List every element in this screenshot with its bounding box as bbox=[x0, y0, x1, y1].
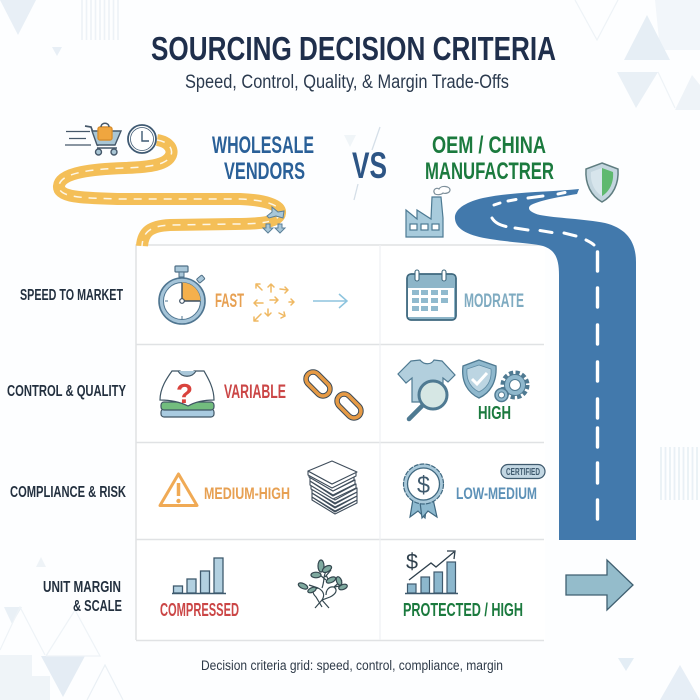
icon: rising bar chart with dollar: $ bbox=[406, 549, 418, 574]
value: protected / high: PROTECTED / HIGH bbox=[403, 600, 523, 620]
background triangles: top right bbox=[575, 0, 700, 110]
arrow: right bbox=[566, 560, 633, 610]
row label: control and quality: CONTROL & QUALITY bbox=[7, 383, 126, 400]
icon: gears bbox=[495, 373, 527, 402]
icon: thin arrow bbox=[313, 294, 347, 308]
row label: unit margin and scale: & SCALE bbox=[73, 598, 122, 615]
VS label: VS bbox=[352, 145, 387, 186]
subtitle: Speed, Control, Quality, & Margin Trade-Offs bbox=[185, 72, 509, 93]
icon: question mark: ? bbox=[176, 378, 193, 409]
row label: compliance and risk: COMPLIANCE & RISK bbox=[10, 484, 126, 501]
icon: tangled plant bbox=[297, 560, 348, 608]
icon: shopping cart with speed lines bbox=[65, 123, 121, 155]
icon: small bar chart bbox=[172, 558, 226, 594]
icon: shield with check bbox=[463, 360, 496, 398]
value: moderate: MODRATE bbox=[464, 291, 524, 312]
icon: factory bbox=[406, 186, 450, 237]
icon: scattered arrows bbox=[254, 284, 294, 321]
background stripes and triangles: bottom right bbox=[618, 447, 700, 700]
title: SOURCING DECISION CRITERIA bbox=[151, 30, 556, 67]
caption: Decision criteria grid: speed, control, compliance, margin bbox=[201, 658, 503, 673]
value: variable: VARIABLE bbox=[224, 382, 286, 403]
heading: wholesale vendors bbox=[212, 132, 314, 185]
icon: shirt under magnifier bbox=[398, 360, 455, 419]
icon: rosette with dollar bbox=[404, 464, 444, 518]
icon: paper stack bbox=[308, 461, 357, 514]
icon: calendar bbox=[407, 270, 456, 320]
badge: certified bbox=[501, 464, 545, 478]
row label: unit margin and scale bbox=[43, 579, 122, 615]
background triangles: bottom left bbox=[0, 557, 123, 700]
icon: stopwatch bbox=[159, 266, 205, 324]
row label: unit margin and scale: UNIT MARGIN bbox=[43, 579, 121, 596]
value: high: HIGH bbox=[478, 403, 511, 423]
heading: OEM / China manufacturer bbox=[425, 132, 554, 185]
value: medium-high: MEDIUM-HIGH bbox=[204, 484, 290, 503]
heading: wholesale vendors: VENDORS bbox=[224, 158, 305, 185]
icon: clock bbox=[128, 125, 156, 153]
icon: clothing stack with question mark bbox=[160, 371, 214, 417]
icon: broken chain bbox=[303, 369, 364, 421]
icon: scattered arrows on road bbox=[263, 207, 285, 233]
panel: criteria grid bbox=[136, 245, 545, 640]
value: low-medium: LOW-MEDIUM bbox=[456, 484, 537, 503]
icon: shield bbox=[586, 163, 618, 202]
icon: warning triangle bbox=[160, 474, 197, 506]
VS label bbox=[352, 127, 387, 200]
background stripes: top left bbox=[82, 0, 118, 40]
value: compressed: COMPRESSED bbox=[160, 600, 239, 620]
heading: OEM / China manufacturer: OEM / CHINA bbox=[432, 132, 546, 159]
background triangles: top left bbox=[0, 0, 356, 147]
row label: speed to market: SPEED TO MARKET bbox=[20, 287, 123, 304]
icon: rising bar chart with dollar bbox=[405, 549, 458, 594]
heading: wholesale vendors: WHOLESALE bbox=[212, 132, 314, 159]
badge: certified: CERTIFIED bbox=[506, 467, 540, 478]
heading: OEM / China manufacturer: MANUFACTRER bbox=[425, 158, 554, 185]
blue road: OEM manufacturer bbox=[455, 189, 636, 540]
icon: rosette with dollar: $ bbox=[417, 472, 430, 499]
yellow winding road: wholesale vendors bbox=[59, 140, 280, 246]
value: fast: FAST bbox=[215, 291, 244, 312]
